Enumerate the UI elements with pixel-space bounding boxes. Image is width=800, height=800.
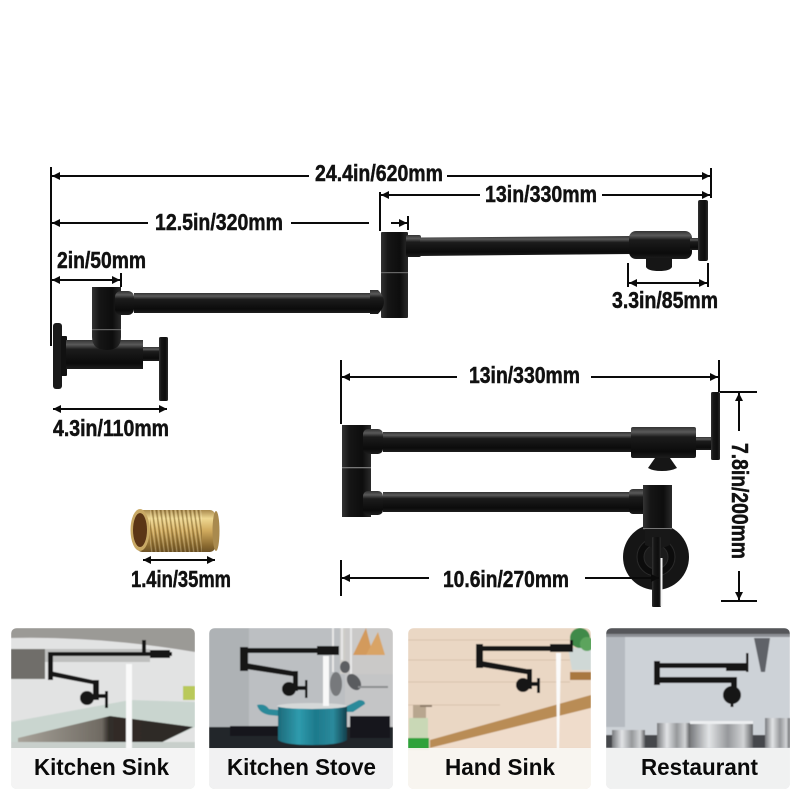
dimension: lower arm 12.5in/320mm: 12.5in/320mm bbox=[155, 209, 283, 235]
photo: hand sink scene bbox=[408, 628, 594, 789]
caption: Hand Sink bbox=[445, 754, 555, 780]
pivot bbox=[370, 232, 408, 318]
dimension: folded width 13in/330mm: 13in/330mm bbox=[469, 362, 580, 388]
lower arm bbox=[115, 291, 371, 315]
dimension: connector 1.4in/35mm bbox=[131, 560, 231, 592]
valve body bbox=[66, 287, 168, 401]
pivot bbox=[342, 425, 371, 517]
dimension: overall width 24.4in/620mm: 24.4in/620mm bbox=[315, 160, 443, 186]
photo: sink scene bbox=[11, 628, 195, 789]
faucet silhouette bbox=[240, 646, 339, 698]
caption: Kitchen Stove bbox=[227, 754, 376, 780]
wall disc and valve bbox=[623, 485, 689, 607]
dimension: 2in/50mm bbox=[52, 247, 146, 287]
panel: kitchen sink bbox=[11, 628, 195, 789]
dimension: upper arm 13in/330mm: 13in/330mm bbox=[485, 181, 597, 207]
dimension: 2in/50mm: 2in/50mm bbox=[57, 247, 146, 273]
faucet: extended side view bbox=[53, 200, 708, 401]
wall plate bbox=[53, 323, 67, 389]
faucet: folded view bbox=[342, 392, 720, 607]
panel: kitchen stove bbox=[209, 628, 393, 789]
caption: Kitchen Sink bbox=[34, 754, 169, 780]
folded upper arm bbox=[363, 392, 720, 471]
caption band bbox=[11, 748, 195, 789]
caption band bbox=[408, 748, 591, 789]
faucet silhouette bbox=[654, 653, 748, 707]
caption: Restaurant bbox=[641, 754, 758, 780]
folded lower arm bbox=[363, 489, 648, 515]
dimension: 4.3in/110mm: 4.3in/110mm bbox=[53, 415, 169, 441]
dimension: connector 1.4in/35mm: 1.4in/35mm bbox=[131, 566, 231, 592]
faucet silhouette bbox=[48, 640, 172, 708]
icon: brass threaded connector bbox=[130, 509, 220, 552]
panel: restaurant bbox=[606, 628, 790, 789]
caption band bbox=[209, 748, 393, 789]
faucet silhouette bbox=[476, 640, 573, 693]
dimension: spout 3.3in/85mm: 3.3in/85mm bbox=[612, 287, 718, 313]
dimension: 7.8in/200mm height: 7.8in/200mm bbox=[727, 443, 753, 559]
caption band bbox=[606, 748, 790, 789]
photo: restaurant scene bbox=[606, 628, 790, 789]
dimension: 10.6in/270mm: 10.6in/270mm bbox=[443, 566, 569, 592]
panel: hand sink bbox=[408, 628, 594, 789]
upper arm and head bbox=[406, 200, 708, 271]
photo: stove scene bbox=[209, 628, 393, 789]
dimension: spout 3.3in/85mm bbox=[612, 263, 718, 313]
